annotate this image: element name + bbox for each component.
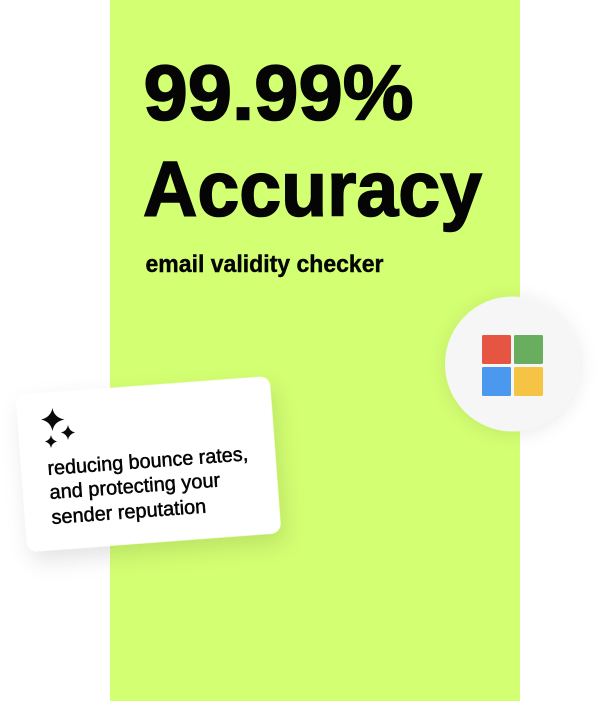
icon: four-colour window logo	[482, 335, 543, 396]
card text: sender reputation	[51, 496, 207, 529]
card text: reducing bounce rates,	[47, 443, 249, 480]
card text	[47, 443, 249, 529]
subheading: email validity checker: email validity checker	[146, 251, 384, 278]
heading: 99.99%: 99.99%	[144, 48, 414, 136]
heading: Accuracy: Accuracy	[143, 144, 482, 232]
card text: and protecting your	[49, 469, 221, 504]
badge: logo circle	[445, 296, 580, 432]
panel: lime background	[110, 0, 520, 701]
icon: sparkles	[41, 408, 75, 448]
card: reducing bounce rates	[16, 376, 281, 552]
